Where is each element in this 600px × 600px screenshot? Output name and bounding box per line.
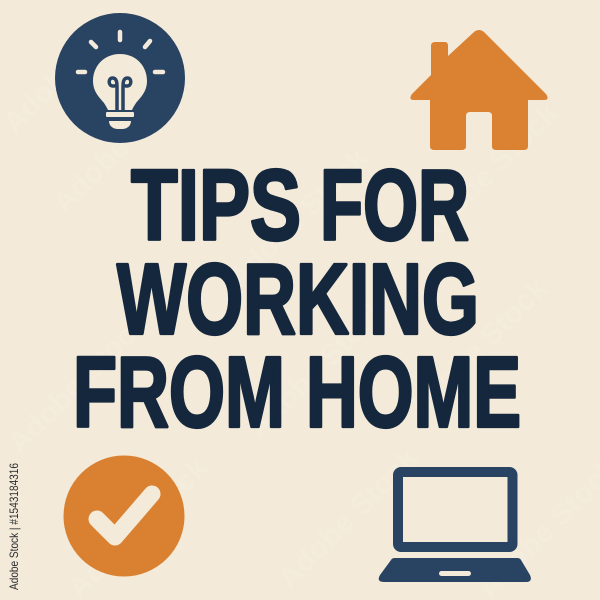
infographic canvas: Adobe Stock bbox=[412, 97, 565, 250]
title word: TIPS: TIPS bbox=[131, 150, 301, 262]
title line 2: WORKING bbox=[117, 244, 479, 356]
title word: FOR: FOR bbox=[320, 150, 469, 262]
stock credit: Adobe Stock | #1543184316 bbox=[7, 463, 21, 590]
infographic canvas: Adobe Stock bbox=[242, 292, 395, 445]
title word: FROM: FROM bbox=[73, 336, 285, 448]
infographic canvas: Adobe Stock bbox=[222, 142, 375, 295]
icon: house bbox=[410, 30, 548, 150]
icon: light bulb bbox=[55, 13, 185, 143]
infographic canvas: Adobe Stock bbox=[47, 67, 200, 220]
title bbox=[73, 150, 521, 448]
icon: check mark badge bbox=[64, 456, 184, 576]
infographic canvas: Adobe Stock bbox=[272, 442, 425, 595]
infographic canvas: Adobe Stock bbox=[402, 272, 555, 425]
title word: HOME: HOME bbox=[306, 336, 521, 448]
infographic canvas: Adobe Stock bbox=[2, 307, 155, 460]
icon: laptop bbox=[379, 472, 531, 582]
